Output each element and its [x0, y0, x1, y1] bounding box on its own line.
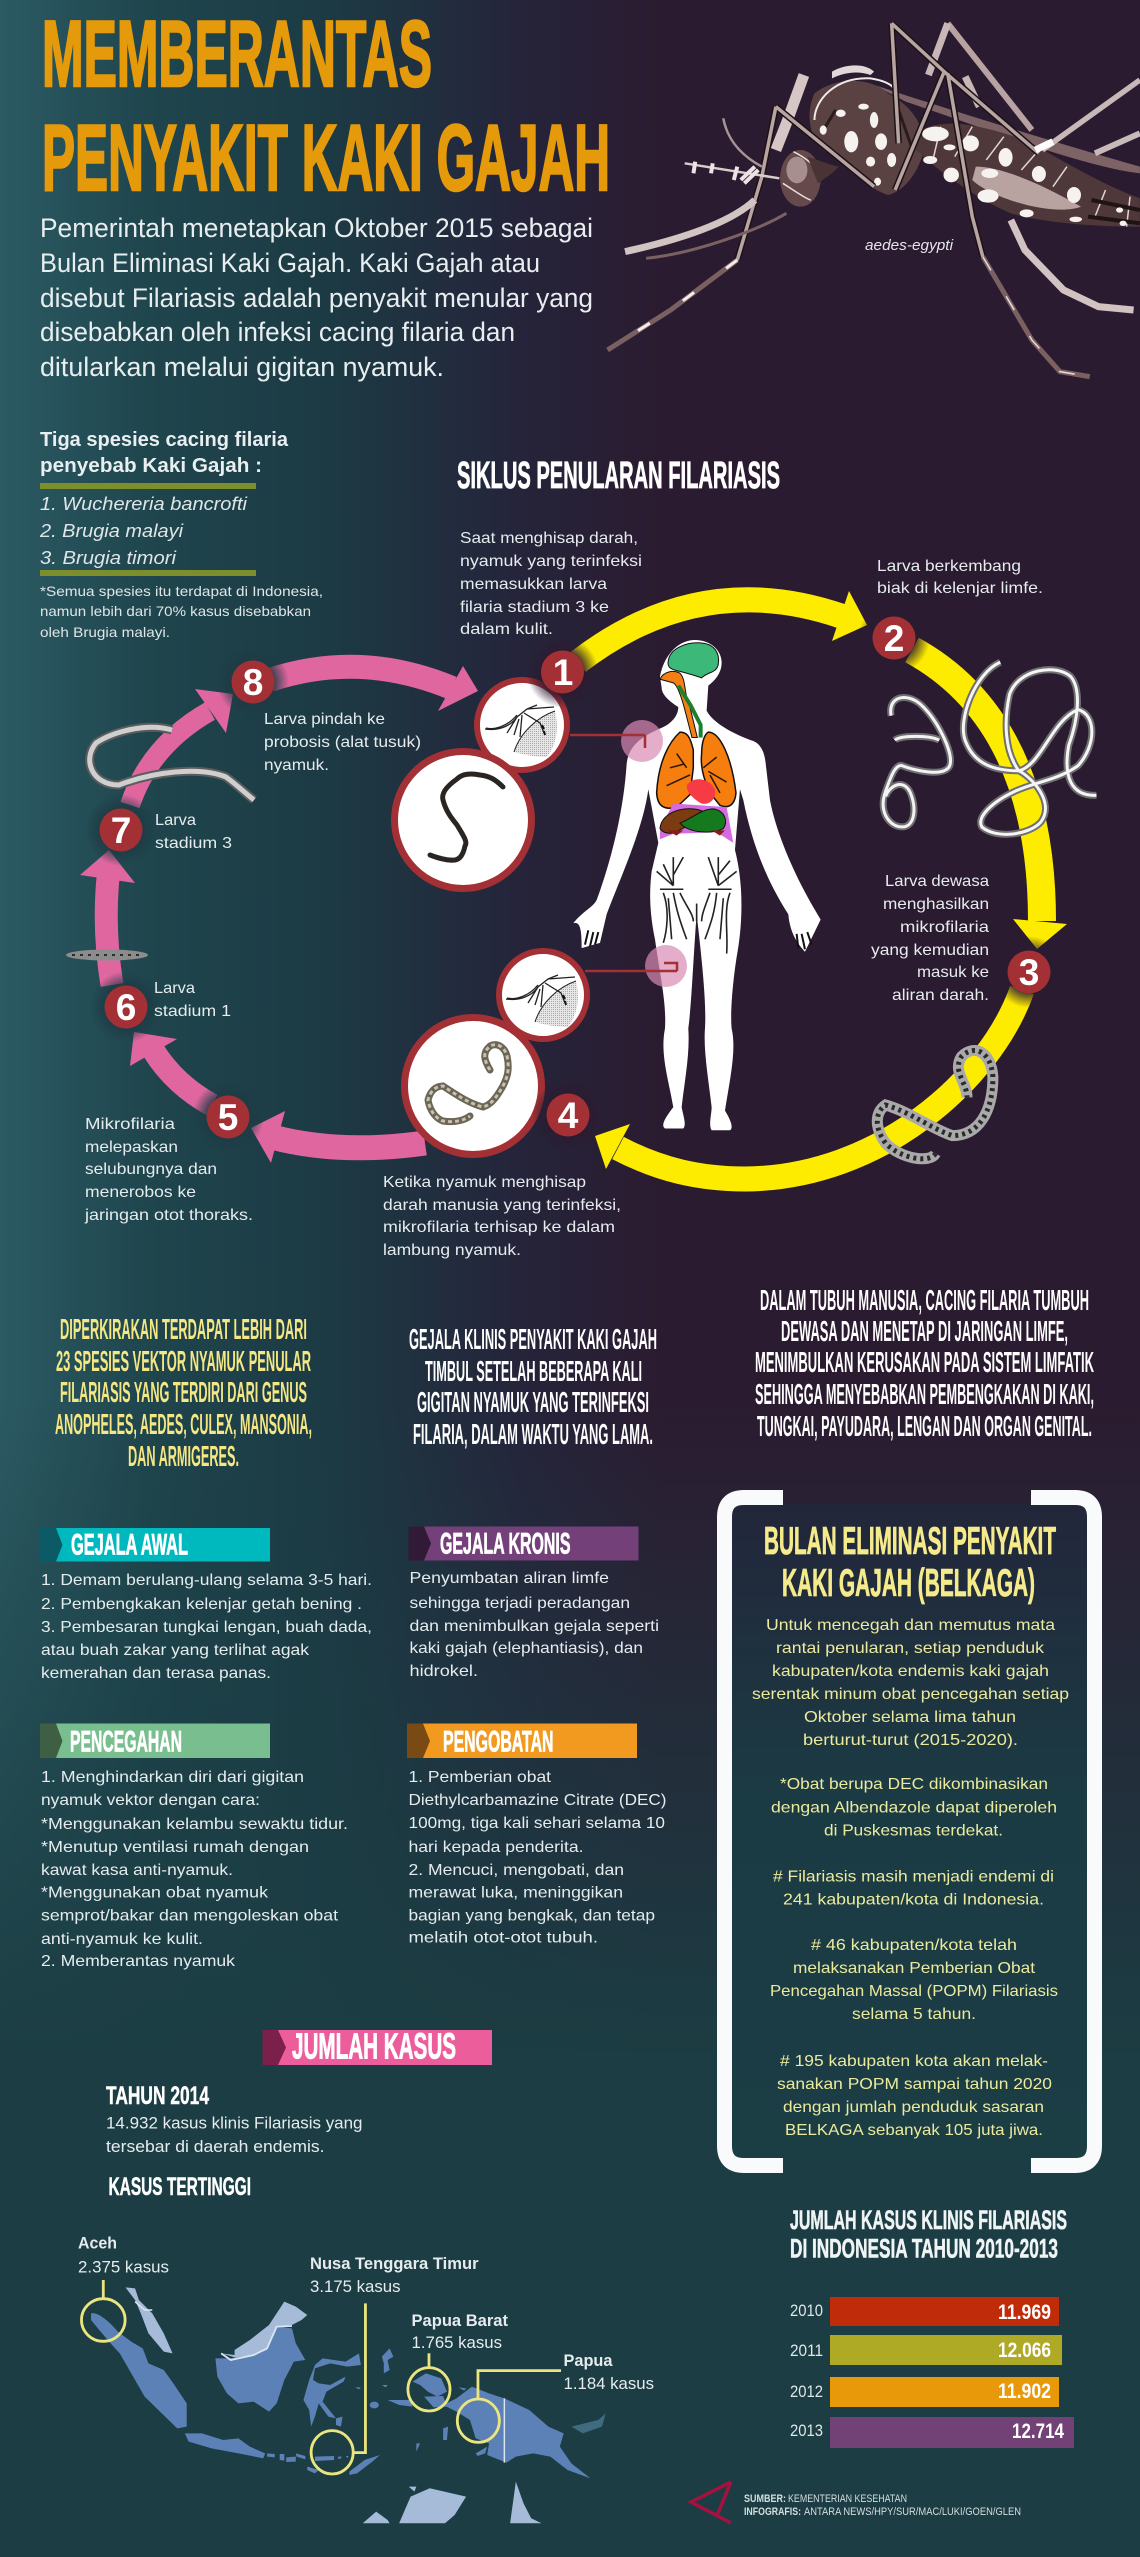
bar chart: 2010: [790, 2301, 823, 2320]
logo: Antara: [691, 2482, 731, 2523]
text: step 5: [84, 1116, 253, 1224]
text: DIPERKIRAKAN TERDAPAT LEBIH DARI: [60, 1314, 307, 1346]
heading: kasus tertinggi: KASUS TERTINGGI: [108, 2173, 251, 2201]
panel body text: selama 5 tahun.: [852, 2006, 976, 2023]
text: pengobatan: hari kepada penderita.: [408, 1839, 584, 1856]
number badges 1-8: 3: [1019, 952, 1039, 993]
text: pencegahan: 1. Menghindarkan diri dari gigitan: [41, 1769, 304, 1786]
text: pencegahan: *Menutup ventilasi rumah dengan: [41, 1839, 309, 1856]
text: gejala kronis: sehingga terjadi peradangan: [410, 1595, 630, 1612]
title: [42, 1, 610, 210]
text: step 5: menerobos ke: [85, 1184, 196, 1201]
species list: 2. Brugia malayi: [39, 521, 184, 541]
panel body text: 241 kabupaten/kota di Indonesia.: [783, 1892, 1044, 1908]
arrows: yellow human-phase cycle: [578, 591, 1067, 1179]
panel body text: sanakan POPM sampai tahun 2020: [777, 2076, 1052, 2093]
text: step 4: mikrofilaria terhisap ke dalam: [383, 1219, 615, 1236]
illustration: larva stage 1: [66, 950, 148, 960]
text: tahun 2014: tersebar di daerah endemis.: [106, 2137, 324, 2156]
map label: Aceh: 2.375 kasus: [78, 2258, 169, 2276]
heading: transmission cycle: SIKLUS PENULARAN FILARIASIS: [457, 455, 780, 497]
bar chart: 11.969: [998, 2301, 1051, 2324]
text: pencegahan: [41, 1769, 348, 1970]
banner: jumlah kasus: JUMLAH KASUS: [292, 2026, 456, 2066]
panel body text: dengan Albendazole dapat diperoleh: [771, 1800, 1057, 1816]
text: step 1: dalam kulit.: [460, 621, 553, 638]
title: MEMBERANTAS: [42, 1, 432, 106]
panel body text: [752, 1617, 1069, 2139]
panel body text: BELKAGA sebanyak 105 juta jiwa.: [785, 2122, 1043, 2139]
text block: inside human body: [755, 1285, 1094, 1443]
panel body text: Oktober selama lima tahun: [804, 1709, 1016, 1726]
text: step 6: [154, 980, 231, 1020]
text: GIGITAN NYAMUK YANG TERINFEKSI: [417, 1387, 649, 1419]
text: pengobatan: 1. Pemberian obat: [408, 1769, 552, 1786]
text: tahun 2014: [106, 2082, 362, 2156]
panel body text: Untuk mencegah dan memutus mata: [766, 1617, 1055, 1634]
bar chart: 2012: [790, 2382, 823, 2401]
text: step 7: [155, 812, 232, 852]
panel body text: *Obat berupa DEC dikombinasikan: [780, 1776, 1048, 1793]
text: step 7: stadium 3: [155, 835, 232, 852]
circle: microfilaria bottom: [404, 1018, 542, 1154]
map label: Papua: Papua: [564, 2351, 613, 2370]
text: gejala kronis: Penyumbatan aliran limfe: [410, 1570, 609, 1587]
number badges 1-8: 2: [884, 618, 904, 659]
text: FILARIASIS YANG TERDIRI DARI GENUS: [60, 1377, 307, 1409]
text: pencegahan: semprot/bakar dan mengoleskan obat: [41, 1908, 339, 1924]
illustration: human body with organs: [573, 640, 821, 1130]
species note: [40, 583, 323, 640]
text: pengobatan: 2. Mencuci, mengobati, dan: [408, 1862, 624, 1879]
text: step 8: nyamuk.: [264, 757, 329, 774]
text: step 6: Larva: [154, 980, 195, 997]
bar chart: 2011: [790, 2341, 823, 2360]
text block: clinical symptoms: [409, 1324, 657, 1451]
text: gejala kronis: [410, 1570, 659, 1680]
text: pengobatan: bagian yang bengkak, dan tetap: [408, 1908, 655, 1924]
species note: oleh Brugia malayi.: [40, 624, 170, 640]
text: gejala kronis: dan menimbulkan gejala seperti: [410, 1618, 659, 1635]
source credits: INFOGRAFIS:: [744, 2506, 801, 2518]
text: step 3: yang kemudian: [871, 942, 989, 959]
map label: Papua: [564, 2351, 654, 2393]
text: step 1: [460, 530, 642, 638]
text: gejala awal: atau buah zakar yang terlihat agak: [41, 1642, 310, 1659]
text: gejala awal: 1. Demam berulang-ulang selama 3-5 hari.: [41, 1572, 372, 1589]
text: pencegahan: 2. Memberantas nyamuk: [41, 1953, 236, 1970]
text: step 8: Larva pindah ke: [264, 711, 385, 728]
number badges 1-8: 5: [218, 1097, 238, 1138]
panel body text: serentak minum obat pencegahan setiap: [752, 1686, 1069, 1703]
species list: 3. Brugia timori: [40, 548, 177, 568]
number badges 1-8: 8: [243, 662, 263, 703]
intro paragraph: disebabkan oleh infeksi cacing filaria dan: [40, 317, 515, 347]
text: gejala kronis: hidrokel.: [410, 1663, 478, 1680]
text: step 3: aliran darah.: [892, 987, 989, 1004]
banner: gejala kronis: GEJALA KRONIS: [440, 1528, 570, 1560]
circle: mosquito bite top: [477, 680, 567, 770]
text: pengobatan: merawat luka, meninggikan: [408, 1884, 623, 1902]
panel body text: melaksanakan Pemberian Obat: [793, 1960, 1036, 1977]
circle: larva top: [394, 752, 532, 888]
species list: [39, 494, 248, 568]
text: 23 SPESIES VEKTOR NYAMUK PENULAR: [56, 1346, 311, 1378]
text: tahun 2014: TAHUN 2014: [106, 2082, 209, 2110]
panel body text: dengan jumlah penduduk sasaran: [783, 2099, 1044, 2116]
map label: Papua: 1.184 kasus: [564, 2374, 654, 2393]
text: step 4: darah manusia yang terinfeksi,: [383, 1197, 621, 1214]
text: pengobatan: [408, 1769, 666, 1946]
text: step 5: selubungnya dan: [85, 1161, 217, 1178]
heading: species: Tiga spesies cacing filaria: [40, 429, 289, 451]
text: tahun 2014: 14.932 kasus klinis Filariasis yang: [106, 2114, 362, 2132]
text: step 3: masuk ke: [917, 964, 989, 981]
map label: Nusa Tenggara Timur: [310, 2254, 479, 2296]
text: step 4: [383, 1174, 621, 1259]
panel body text: berturut-turut (2015-2020).: [803, 1732, 1018, 1749]
text block: vector species: [55, 1314, 312, 1473]
text: step 6: stadium 1: [154, 1003, 231, 1020]
text: step 4: Ketika nyamuk menghisap: [383, 1174, 586, 1191]
illustration: adult worm near step 2: [883, 662, 1096, 834]
text: pencegahan: kawat kasa anti-nyamuk.: [41, 1862, 233, 1879]
panel body text: kabupaten/kota endemis kaki gajah: [772, 1663, 1049, 1680]
number badges 1-8: 6: [116, 987, 136, 1028]
text: step 5: jaringan otot thoraks.: [84, 1207, 253, 1224]
species list: 1. Wuchereria bancrofti: [40, 494, 248, 514]
panel body text: Pencegahan Massal (POPM) Filariasis: [770, 1983, 1058, 2000]
text: pengobatan: melatih otot-otot tubuh.: [408, 1930, 598, 1946]
bite lines and pink markers on body: [570, 720, 687, 987]
heading: species: penyebab Kaki Gajah :: [40, 455, 262, 477]
text: step 2: biak di kelenjar limfe.: [877, 580, 1043, 597]
bar chart: 12.714: [1012, 2420, 1064, 2443]
illustration: aedes mosquito: [608, 23, 1140, 377]
intro paragraph: Bulan Eliminasi Kaki Gajah. Kaki Gajah atau: [40, 248, 540, 278]
text: pencegahan: *Menggunakan obat nyamuk: [41, 1884, 269, 1902]
text: step 5: melepaskan: [85, 1139, 178, 1156]
panel body text: rantai penularan, setiap penduduk: [776, 1640, 1045, 1657]
map label: Papua Barat: 1.765 kasus: [412, 2333, 502, 2352]
text: gejala awal: 2. Pembengkakan kelenjar getah bening .: [41, 1596, 362, 1613]
text: step 1: Saat menghisap darah,: [460, 530, 638, 547]
text: gejala kronis: kaki gajah (elephantiasis), dan: [410, 1640, 643, 1657]
text: step 3: Larva dewasa: [885, 873, 989, 890]
text: gejala awal: [41, 1572, 372, 1682]
species note: namun lebih dari 70% kasus disebabkan: [40, 603, 311, 619]
chart title: [790, 2205, 1067, 2264]
text: step 3: [871, 873, 989, 1004]
circle: mosquito bite bottom: [499, 951, 587, 1039]
panel: three filaria species: [39, 429, 323, 640]
text: ANOPHELES, AEDES, CULEX, MANSONIA,: [55, 1409, 312, 1441]
text: step 3: mikrofilaria: [900, 919, 989, 936]
mosquito caption: aedes-egypti: [865, 237, 954, 254]
heading: species: [40, 429, 289, 477]
map label: Nusa Tenggara Timur: Nusa Tenggara Timur: [310, 2254, 479, 2273]
bar chart: [790, 2297, 1074, 2448]
panel body text: # Filariasis masih menjadi endemi di: [773, 1868, 1054, 1886]
text: pencegahan: nyamuk vektor dengan cara:: [41, 1792, 260, 1809]
source credits: SUMBER:: [744, 2493, 786, 2505]
panel heading: [764, 1520, 1056, 1605]
arrows: pink mosquito-phase cycle: [80, 666, 478, 1163]
map label: Papua Barat: Papua Barat: [412, 2311, 508, 2330]
banner: gejala awal: GEJALA AWAL: [71, 1528, 188, 1562]
title: PENYAKIT KAKI GAJAH: [42, 105, 610, 210]
source credits: [744, 2493, 1021, 2518]
illustration: larva stage 3: [90, 727, 254, 800]
illustration: microfilaria worm near step 3: [877, 1050, 993, 1159]
text: step 4: lambung nyamuk.: [383, 1242, 521, 1259]
text: step 1: nyamuk yang terinfeksi: [460, 553, 642, 570]
source credits: ANTARA NEWS/HPY/SUR/MAC/LUKI/GOEN/GLEN: [804, 2506, 1021, 2518]
panel body text: # 195 kabupaten kota akan melak-: [780, 2053, 1048, 2070]
text: pencegahan: *Menggunakan kelambu sewaktu tidur.: [41, 1816, 348, 1833]
number badges 1-8: 1: [553, 652, 573, 693]
banner: gejala kronis: [408, 1526, 638, 1560]
panel: bulan eliminasi: [724, 1498, 1094, 2166]
number badges 1-8: 7: [111, 810, 131, 851]
text: step 8: probosis (alat tusuk): [264, 734, 421, 751]
text: gejala awal: kemerahan dan terasa panas.: [41, 1665, 271, 1682]
species note: *Semua spesies itu terdapat di Indonesia,: [40, 583, 323, 599]
number badges 1-8: [85, 602, 1065, 1153]
intro paragraph: [40, 213, 593, 382]
text: gejala awal: 3. Pembesaran tungkai lengan, buah dada,: [41, 1619, 372, 1636]
intro paragraph: Pemerintah menetapkan Oktober 2015 sebagai: [40, 213, 593, 243]
text: pengobatan: 100mg, tiga kali sehari selama 10: [408, 1815, 665, 1832]
text: step 3: menghasilkan: [883, 896, 989, 913]
intro paragraph: ditularkan melalui gigitan nyamuk.: [40, 352, 444, 382]
banner: pencegahan: PENCEGAHAN: [70, 1726, 182, 1758]
text block: vector species: DAN ARMIGERES.: [128, 1441, 239, 1473]
text: step 8: [264, 711, 421, 774]
banner: jumlah kasus: [262, 2026, 492, 2066]
number badges 1-8: 4: [558, 1095, 579, 1136]
banner: pengobatan: PENGOBATAN: [443, 1726, 554, 1758]
text: step 1: memasukkan larva: [460, 576, 607, 593]
panel body text: di Puskesmas terdekat.: [824, 1822, 1003, 1840]
text: step 7: Larva: [155, 812, 196, 829]
source credits: KEMENTERIAN KESEHATAN: [788, 2493, 907, 2505]
intro paragraph: disebut Filariasis adalah penyakit menular yang: [40, 283, 593, 313]
bar chart: 2013: [790, 2421, 823, 2440]
text: GEJALA KLINIS PENYAKIT KAKI GAJAH: [409, 1324, 657, 1356]
panel body text: # 46 kabupaten/kota telah: [811, 1937, 1017, 1954]
text: step 5: Mikrofilaria: [85, 1116, 175, 1133]
text: pencegahan: anti-nyamuk ke kulit.: [41, 1931, 203, 1948]
map label: Aceh: Aceh: [78, 2234, 117, 2252]
text: step 1: filaria stadium 3 ke: [460, 599, 609, 616]
text: step 2: Larva berkembang: [877, 558, 1021, 575]
map: Indonesia: [81, 2280, 606, 2523]
bar chart: 12.066: [998, 2339, 1051, 2362]
bar chart: 11.902: [998, 2380, 1051, 2403]
text: pengobatan: Diethylcarbamazine Citrate (DEC): [408, 1792, 666, 1809]
text: FILARIA, DALAM WAKTU YANG LAMA.: [413, 1419, 653, 1451]
text: step 2: [877, 558, 1043, 597]
map label: Papua Barat: [412, 2311, 508, 2352]
text: TIMBUL SETELAH BEBERAPA KALI: [425, 1356, 642, 1388]
map label: Nusa Tenggara Timur: 3.175 kasus: [310, 2277, 400, 2296]
map label: Aceh: [78, 2234, 169, 2276]
